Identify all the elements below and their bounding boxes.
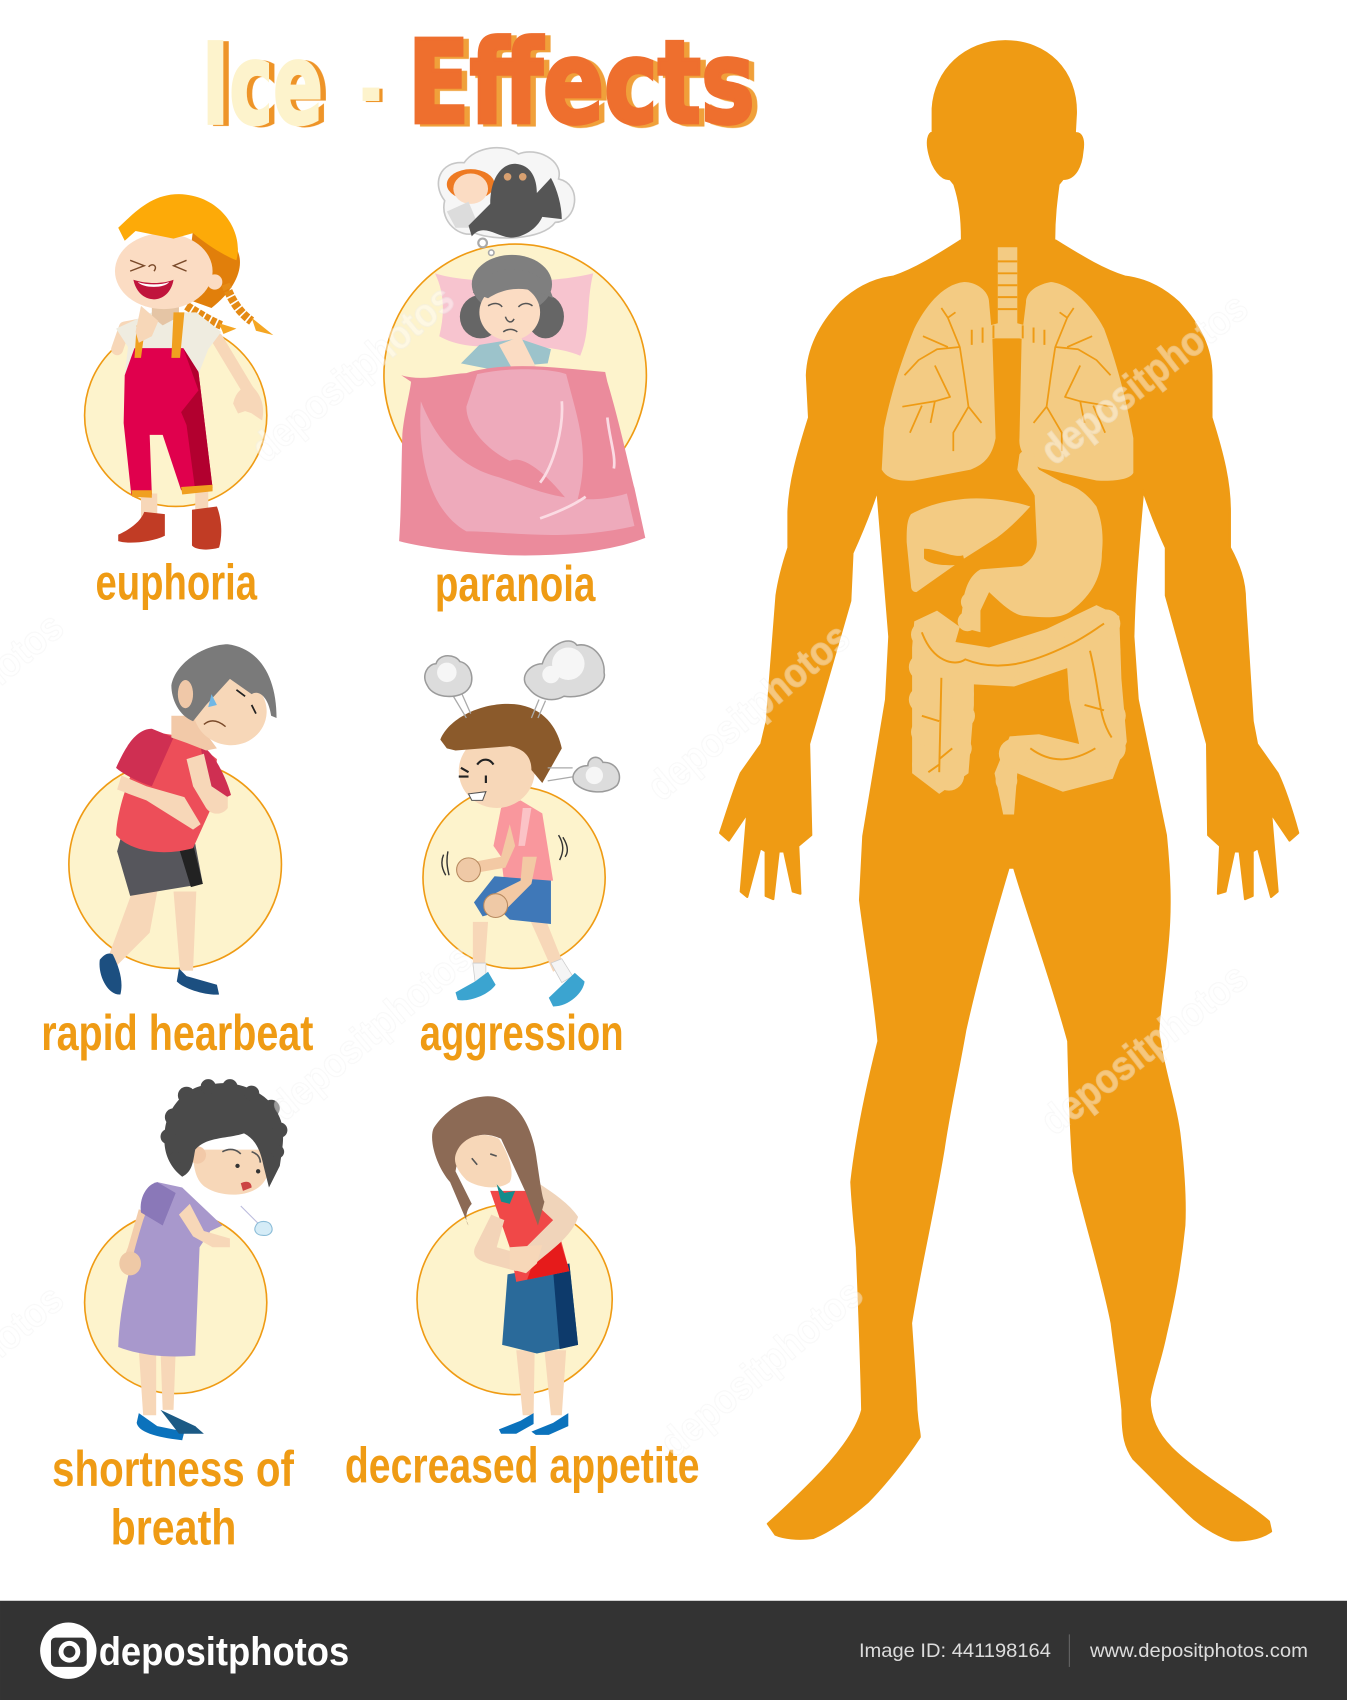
panel: aggression <box>420 641 624 1061</box>
bronchial tree <box>902 308 1113 451</box>
body silhouette with organs <box>720 41 1298 1540</box>
watermarks: depositphotos <box>1031 954 1256 1144</box>
title: - <box>360 39 382 140</box>
trachea and bronchi <box>959 247 1057 347</box>
steam clouds <box>425 641 619 792</box>
circle <box>417 1204 612 1395</box>
gallbladder <box>924 549 965 565</box>
circle <box>85 1211 267 1394</box>
panel: decreased appetite <box>345 1096 700 1494</box>
right lung <box>1019 282 1133 481</box>
title <box>202 17 755 151</box>
icon: camera logo <box>40 1622 97 1679</box>
thought bubble <box>438 148 575 255</box>
liver <box>907 498 1030 592</box>
title: Ice <box>202 19 323 151</box>
angry boy <box>440 694 585 1006</box>
circle <box>423 786 605 968</box>
label: paranoia <box>435 556 596 612</box>
panel: paranoia <box>384 148 646 612</box>
girl laughing <box>115 194 273 550</box>
website: www.depositphotos.com <box>1089 1640 1308 1662</box>
panel: euphoria <box>85 194 273 611</box>
watermarks: depositphotos <box>260 934 481 1129</box>
panel: rapid heartbeat <box>41 644 313 1061</box>
watermarks: depositphotos <box>638 614 858 809</box>
watermarks <box>0 275 1256 1471</box>
circle <box>85 324 267 506</box>
label: rapid hearbeat <box>41 1005 313 1061</box>
label: aggression <box>420 1005 624 1061</box>
panel: shortness of breath <box>52 1079 294 1555</box>
stomach <box>960 450 1103 632</box>
label: breath <box>111 1499 236 1555</box>
brand name: depositphotos <box>99 1629 349 1674</box>
man holding chest <box>100 644 277 995</box>
circle <box>69 760 281 968</box>
intestine folds <box>922 624 1112 772</box>
image id: Image ID: 441198164 <box>859 1640 1051 1662</box>
footer bar <box>0 1601 1347 1700</box>
left lung <box>882 282 996 481</box>
woman in bed <box>399 255 645 555</box>
watermarks: depositphotos <box>1031 284 1256 473</box>
large intestine <box>909 592 1127 814</box>
girl holding stomach <box>432 1096 578 1435</box>
silhouette <box>720 41 1298 1540</box>
watermarks: depositphotos <box>242 275 463 471</box>
title: Effects <box>408 17 755 151</box>
circle <box>384 244 646 506</box>
label: shortness of <box>52 1441 294 1497</box>
label: decreased appetite <box>345 1438 700 1494</box>
woman short of breath <box>118 1079 287 1440</box>
watermarks: depositphotos <box>651 1270 871 1466</box>
label <box>52 1441 294 1555</box>
label: euphoria <box>95 555 258 611</box>
